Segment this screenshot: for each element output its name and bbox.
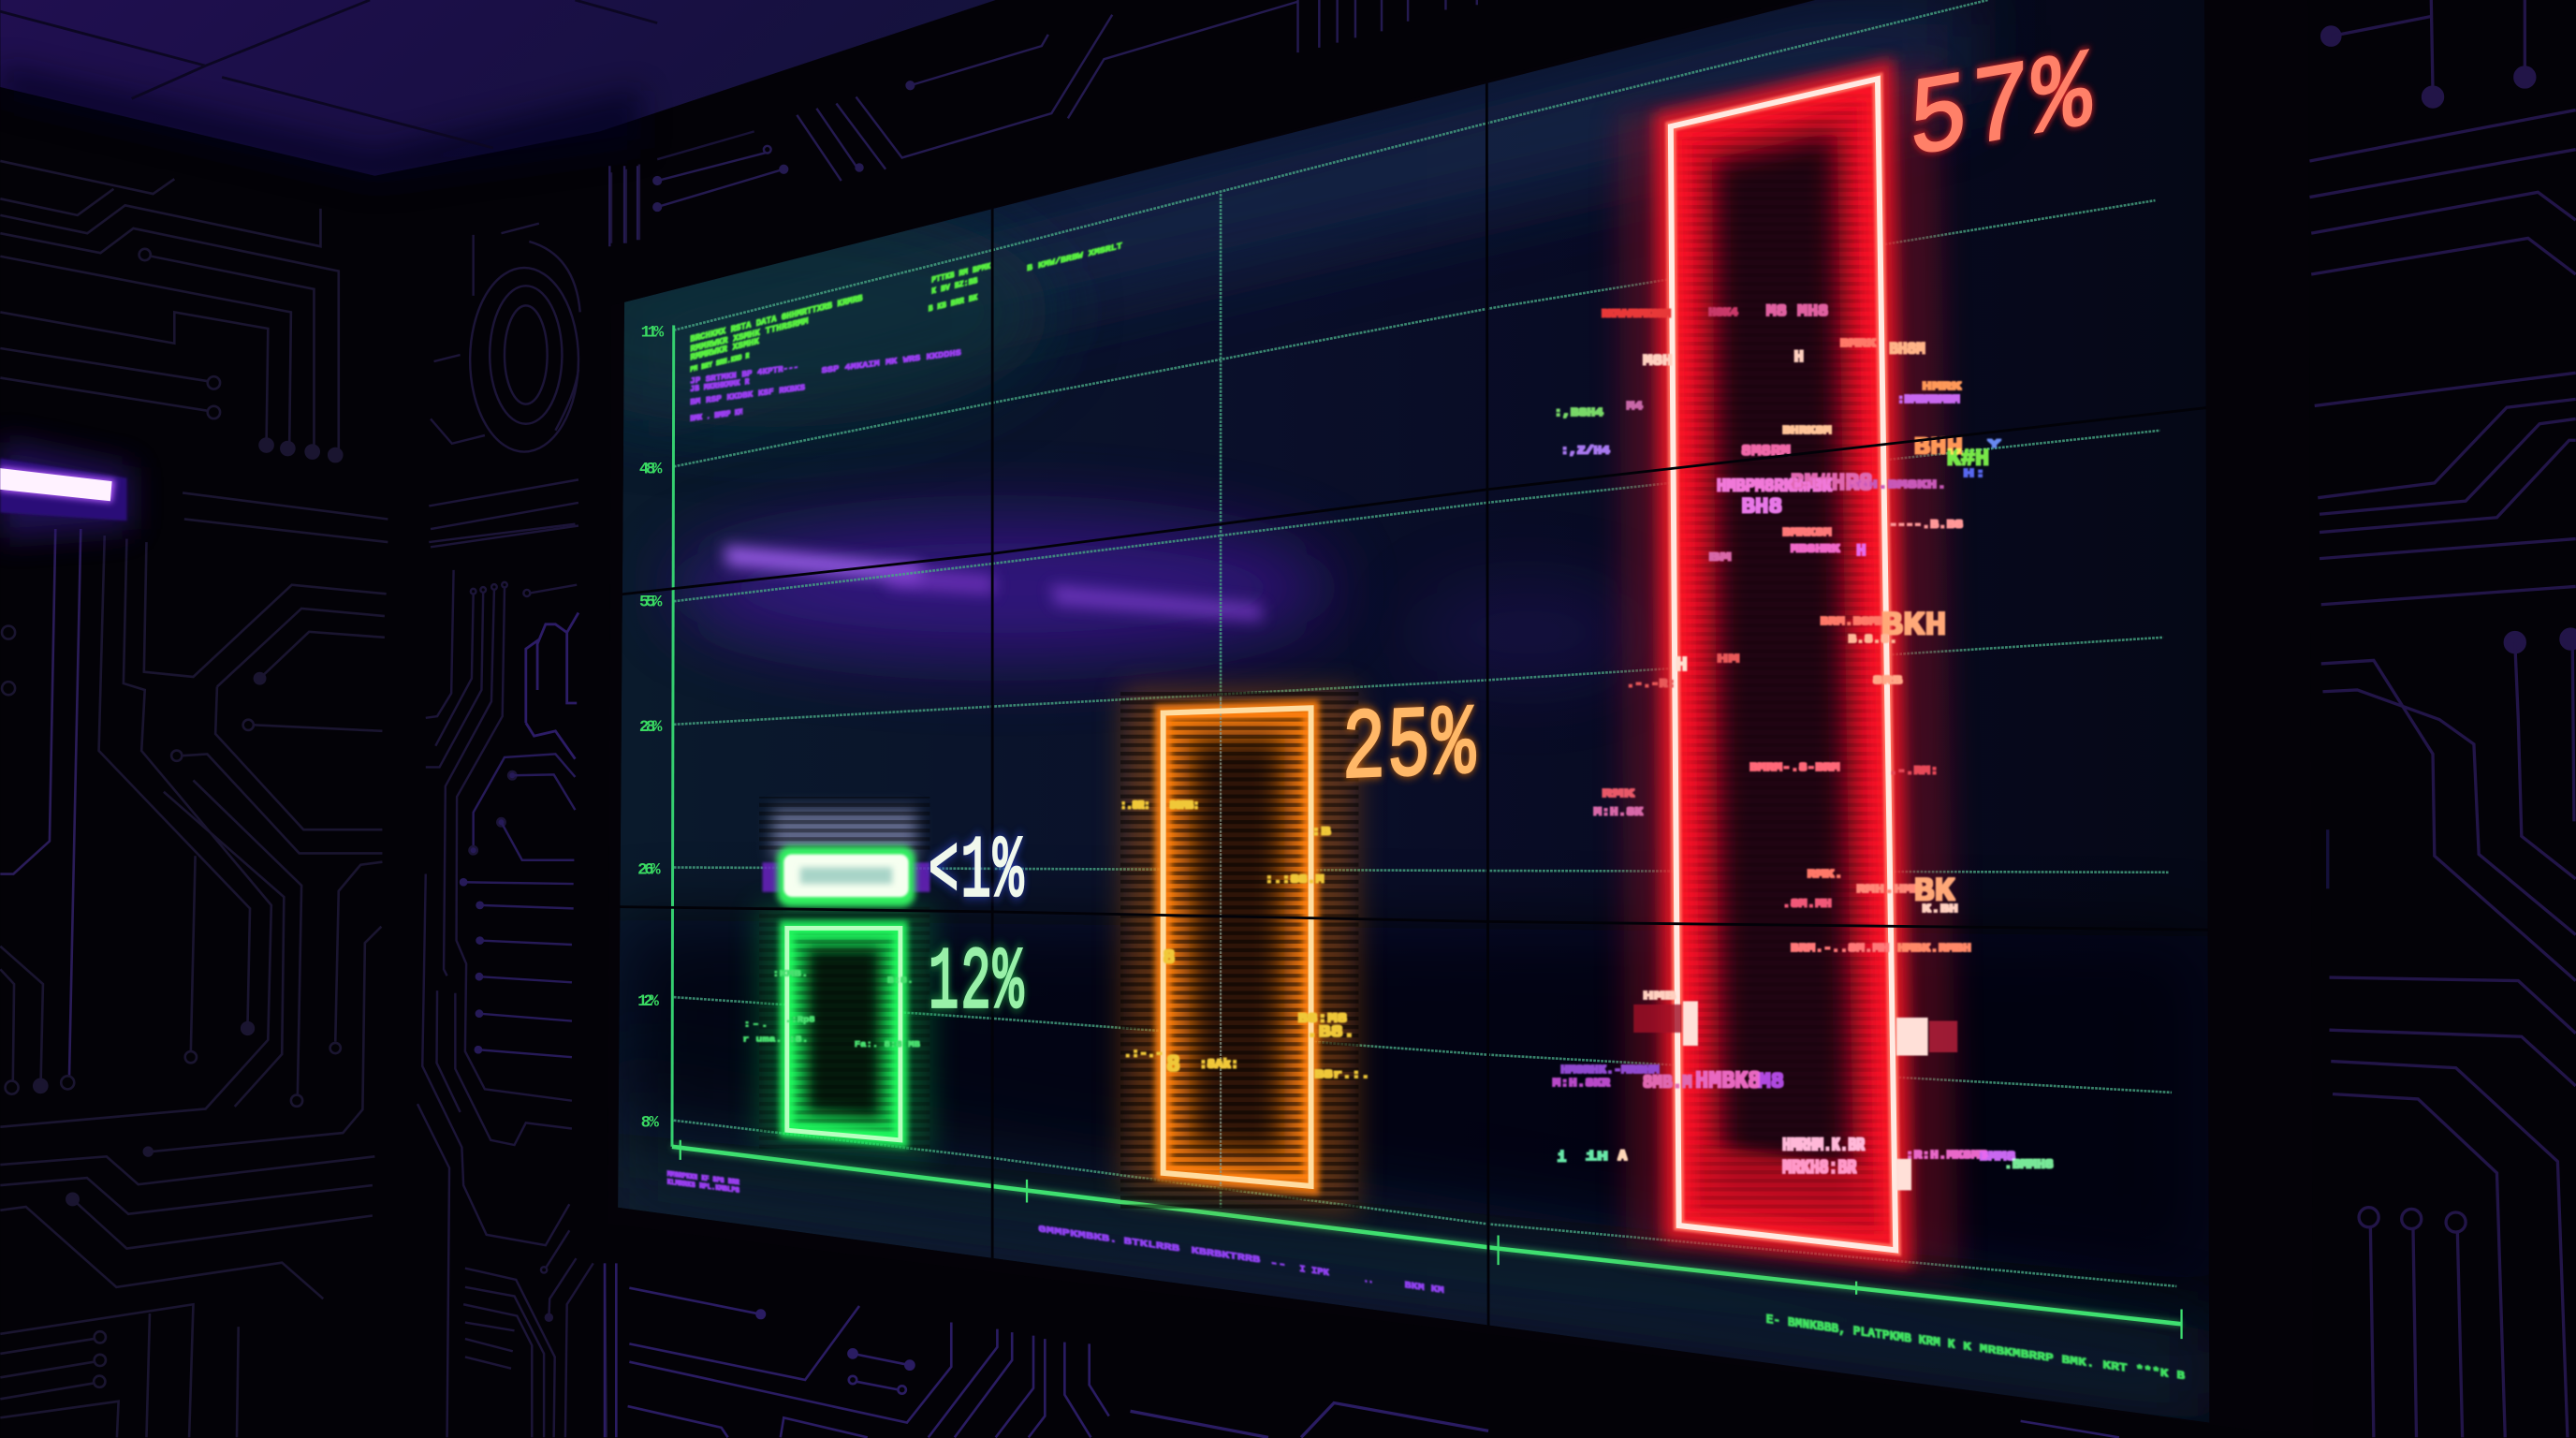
- green bar scanlines: [759, 907, 929, 1153]
- footer text centre purple: I IPK: [1299, 1264, 1329, 1278]
- header text green right: PTTKB RM BPMK: [931, 261, 991, 286]
- orange bar haze: [1124, 690, 1355, 1212]
- red bar glitch fragments: MRKH8:BR: [1782, 1157, 1856, 1180]
- red bar glitch fragments: HMB: [1643, 990, 1676, 1003]
- green bar outer glow: [787, 928, 900, 1140]
- footer text centre purple: KBRBKTRRB: [1191, 1245, 1260, 1265]
- header text green right: B KMW/BRBW XMSRLT: [1027, 241, 1122, 273]
- red bar outer glow: [1671, 79, 1895, 1250]
- green bar glitch fragments: :KMB.: [772, 969, 809, 978]
- red bar glitch fragments: RMH.BM8KH.: [1848, 478, 1947, 492]
- ceiling with tiles: [0, 0, 996, 184]
- orange bar glitch fragments: 8: [1166, 1053, 1180, 1078]
- label: 25%: 25%: [1342, 689, 1475, 807]
- orange bar interior: [1164, 708, 1311, 1186]
- header text purple: JB MKRHKMMK R: [690, 377, 750, 394]
- y axis labels: 55%: [639, 593, 663, 611]
- header text green right: B KB BRR BK: [929, 292, 978, 314]
- green bar glitch fragments: [742, 969, 921, 1049]
- orange bar glitch fragments: [1120, 799, 1370, 1081]
- bar: white-green under 1%: [759, 797, 929, 907]
- red bar glitch fragments: ----.B.B8: [1889, 518, 1963, 531]
- red bar glitch fragments: M4: [1626, 400, 1643, 413]
- circuit traces: left wall: [0, 161, 388, 1437]
- red bar glitch fragments: BKH: [1881, 607, 1947, 644]
- header text purple: JP SRTMKN BP 4KPTR---: [690, 363, 798, 387]
- red bar glitch fragments: i: [1558, 1150, 1566, 1167]
- green bar glitch fragments: B:8.: [887, 976, 914, 985]
- red bar glitch fragments: :,Z/H4: [1560, 444, 1610, 457]
- red bar glitch fragments: BHRK8M: [1782, 424, 1832, 437]
- red bar glitch fragments: Y: [1988, 437, 2002, 450]
- orange bar glitch fragments: :B: [1311, 825, 1332, 838]
- red bar glitch fragments: M8 MH8: [1766, 302, 1828, 321]
- label: 57%: 57%: [1909, 30, 2091, 188]
- footer text bottom left: KLMRRKS RPL.KMBLPS: [667, 1179, 739, 1196]
- orange bar scanlines: [1120, 690, 1358, 1212]
- red bar glitch fragments: BMRM-.8-BRM: [1749, 761, 1840, 774]
- green bar inner glow: [787, 928, 900, 1140]
- header text green block: RMMRWKR XSMHK TTHRSRMM: [690, 316, 809, 356]
- orange bar neon core: [1164, 708, 1311, 1186]
- header text green block: BRCHKMX RSTA DATA GHHMRTTXRB KRMRB: [690, 293, 863, 345]
- footer text bottom left: [667, 1170, 739, 1196]
- header text green right: K BV BZ:BB: [931, 275, 978, 297]
- bar haze: [772, 808, 916, 860]
- white core: [783, 854, 909, 897]
- red bar glitch fragments: BRM.-..8M.MH: [1791, 942, 1889, 955]
- y axis labels: 12%: [637, 992, 659, 1011]
- purple ambient reflection right: [1412, 583, 1643, 682]
- header text purple: BMK . BMRP KM: [690, 408, 742, 424]
- footer text bottom left: MMGRPKKN KF SPS BRR: [667, 1170, 739, 1187]
- orange bar outer glow: [1164, 708, 1311, 1186]
- chart grid lines: [674, 0, 2176, 1286]
- header text green block: [690, 293, 863, 374]
- dark lower section: [618, 920, 2209, 1282]
- red bar glitch fragments: A: [1618, 1148, 1628, 1165]
- red bar glitch fragments: .-.-R:: [1626, 677, 1676, 690]
- reflected lamp streak right: [1051, 585, 1262, 621]
- footer text centre purple: GMMPKMBKB.: [1038, 1224, 1118, 1245]
- y axis labels: [637, 324, 665, 1133]
- red bar glitch fragments: HMRK: [1922, 380, 1962, 393]
- orange bar glitch fragments: 88MB:: [1170, 799, 1199, 812]
- label: 57%: 57%: [1909, 30, 2091, 188]
- green bar glitch fragments: .:Rp8: [785, 1015, 815, 1024]
- orange bar glitch fragments: 8: [1164, 946, 1175, 969]
- green bar haze: [759, 907, 929, 1158]
- bar haze scanlines: [759, 797, 929, 853]
- screen bezel: [608, 0, 2313, 1437]
- red bar glitch fragments: H:: [1963, 467, 1986, 480]
- red bar glitch fragments: :BMBMBMBM: [1897, 393, 1960, 406]
- red bar glitch fragments: HMBK8: [1695, 1067, 1761, 1095]
- red bar glitch fragments: BM#HR8: [1791, 469, 1873, 497]
- red bar glitch fragments: MB8HRK: [1791, 543, 1840, 556]
- purple fringe: [762, 862, 929, 892]
- red bar glitch fragments: M:H.8KR: [1553, 1077, 1611, 1090]
- red bar glitch fragments: BMM8: [1980, 1150, 2015, 1165]
- footer text centre purple: --: [1270, 1258, 1286, 1270]
- red bar glitch fragments: K#H: [1947, 448, 1989, 473]
- circuit traces: right wall: [2309, 0, 2576, 1437]
- inner tint: [800, 867, 892, 884]
- header text purple: [690, 342, 961, 424]
- orange bar glitch fragments: :.:88.M: [1265, 873, 1325, 886]
- orange bar glitch fragments: B8:M8: [1298, 1011, 1347, 1026]
- blue sheen along top edge: [871, 0, 1992, 322]
- green bar glitch fragments: :-.: [742, 1020, 769, 1030]
- green bar glitch fragments: r uma. :8.: [742, 1034, 809, 1044]
- y axis labels: 26%: [637, 861, 661, 880]
- red bar glitch fragments: HMBPM8RKH#BK: [1717, 477, 1832, 497]
- label: 12%: 12%: [929, 933, 1024, 1034]
- red bar glitch fragments: RMK.: [1807, 868, 1843, 881]
- footer text bottom right: K MRBKMBRRP BMK. KRT ***K B: [1963, 1340, 2186, 1383]
- red bar inner glow: [1671, 79, 1895, 1254]
- panel: video wall screen: [493, 0, 2209, 1423]
- red bar glitch fragments: B.8.8.: [1848, 633, 1897, 646]
- gridline through orange bar: [1220, 698, 1222, 1186]
- bar: red 57%: [1553, 66, 2054, 1273]
- red bar glitch fragments: BM: [1708, 550, 1732, 564]
- red bar glitch fragments: H: [1793, 348, 1804, 367]
- green bar glitch fragments: Fa:. 8:8 MB: [855, 1040, 921, 1049]
- red bar glitch fragments: HMRHM.K.BR: [1782, 1135, 1865, 1155]
- red bar glitch fragments: H8K4: [1708, 306, 1738, 319]
- y axis labels: 48%: [639, 460, 663, 478]
- circuit traces: bottom band below screen: [605, 1263, 2119, 1437]
- red bar interior: [1671, 79, 1895, 1250]
- header text purple: BM RSP KKDBK KSF RKBKS: [690, 383, 805, 407]
- red bar glitch fragments: [1553, 302, 2054, 1189]
- y axis: [672, 325, 674, 1147]
- red bar glitch fragments: 8MB.M: [1643, 1073, 1692, 1093]
- orange bar glitch fragments: :8Ak:: [1199, 1058, 1238, 1073]
- red bar glitch fragments: M8: [1758, 1070, 1784, 1094]
- red bar glitch fragments: :,B8H4: [1554, 406, 1603, 419]
- red bar glitch fragments: RKM##BMK8RM: [1602, 308, 1671, 321]
- red bar glitch fragments: 8M8RM: [1741, 443, 1791, 460]
- orange bar glitch fragments: .:-.-: [1124, 1047, 1164, 1060]
- red bar glitch fragments: :R:H.MK8MB: [1906, 1149, 1988, 1162]
- header text green block: RMMRWKR XSMHK: [690, 336, 760, 364]
- x axis: [672, 1140, 2182, 1339]
- red bar glitch fragments: BH8: [1741, 494, 1782, 519]
- teal sheen top left: [623, 225, 1045, 433]
- reflected lamp streak left: [724, 546, 994, 594]
- green glow: [777, 846, 915, 907]
- teal sheen bottom: [758, 1173, 2209, 1417]
- fluorescent lamp: [0, 440, 132, 539]
- header text green block: PM BRY SRH.KRD R: [690, 352, 750, 374]
- red bar glitch fragments: RMK: [1602, 787, 1635, 800]
- footer text centre purple: [1038, 1224, 1444, 1296]
- red bar glitch fragments: HMBK.RMBH: [1897, 942, 1971, 955]
- footer text centre purple: BTKLRRB: [1124, 1236, 1179, 1254]
- red bar glitch fragments: BK: [1914, 873, 1955, 911]
- seams between display panels: [618, 79, 2209, 1334]
- red bar glitch fragments: .BMMH8: [2004, 1158, 2054, 1173]
- red bar neon core: [1671, 79, 1895, 1250]
- purple ambient reflection: [674, 519, 1331, 657]
- footer text bottom right: [1766, 1313, 2186, 1384]
- bar: orange 25%: [1120, 690, 1370, 1212]
- green bar neon core: [787, 928, 900, 1140]
- red bar glitch fragments: RMH.HMK: [1856, 883, 1923, 896]
- red bar glitch fragments: BHH: [1914, 433, 1963, 461]
- green bar interior: [787, 928, 900, 1140]
- red bar glitch fragments: 8RB: [1873, 674, 1903, 687]
- screen surface: [618, 0, 2209, 1423]
- circuit traces: top band above screen: [609, 0, 1477, 246]
- red bar glitch fragments: HM: [1717, 653, 1740, 666]
- red bar glitch fragments: BH8M: [1889, 340, 1925, 359]
- red bar glitch fragments: HM8RHK.-MRBHM: [1560, 1064, 1660, 1077]
- label: under 1%: <1%: [929, 822, 1024, 921]
- y axis labels: 8%: [641, 1114, 659, 1133]
- red bar glitch fragments: H: [1856, 542, 1866, 561]
- y axis labels: 11%: [641, 324, 665, 343]
- red bar haze: [1618, 66, 1958, 1273]
- footer text bottom right: E- BMNKBBB, PLATPKMB KRM K: [1766, 1313, 1955, 1353]
- label: 12%: 12%: [929, 933, 1024, 1034]
- red bar glitch fragments: K.BH: [1922, 902, 1958, 916]
- red bar glitch fragments: BMRK8M: [1782, 526, 1832, 539]
- orange bar glitch fragments: B8r.:.: [1314, 1068, 1370, 1081]
- orange bar inner glow: [1164, 708, 1311, 1186]
- red bar glitch fragments: M8H: [1643, 353, 1673, 370]
- red bar glitch fragments: M:H.8K: [1593, 805, 1644, 818]
- y axis labels: 28%: [639, 718, 663, 737]
- red bar glitch fragments: H: [1676, 654, 1688, 677]
- red bar glitch fragments: iH: [1586, 1150, 1608, 1165]
- red bar glitch fragments: .8M.MH: [1782, 898, 1832, 911]
- label: under 1%: <1%: [929, 822, 1024, 921]
- circuit traces: corner column with round emblem: [417, 164, 639, 1437]
- label: 25%: 25%: [1342, 689, 1475, 807]
- header text green right: [929, 229, 1122, 314]
- red bar glitch fragments: BMRK: [1840, 337, 1877, 350]
- orange bar glitch fragments: :.8R:: [1120, 799, 1150, 812]
- footer text centre purple: ..: [1364, 1274, 1373, 1285]
- footer text centre purple: BKM KM: [1405, 1280, 1444, 1296]
- bar: green 12%: [742, 907, 929, 1158]
- header text purple: SSP 4MKAIM MK WRS KKDDHS: [822, 348, 961, 375]
- orange bar glitch fragments: .B8.: [1306, 1023, 1355, 1042]
- red bar glitch fragments: .-.RM:: [1889, 764, 1939, 777]
- red bar glitch fragments: BRM.B8MK: [1821, 615, 1886, 628]
